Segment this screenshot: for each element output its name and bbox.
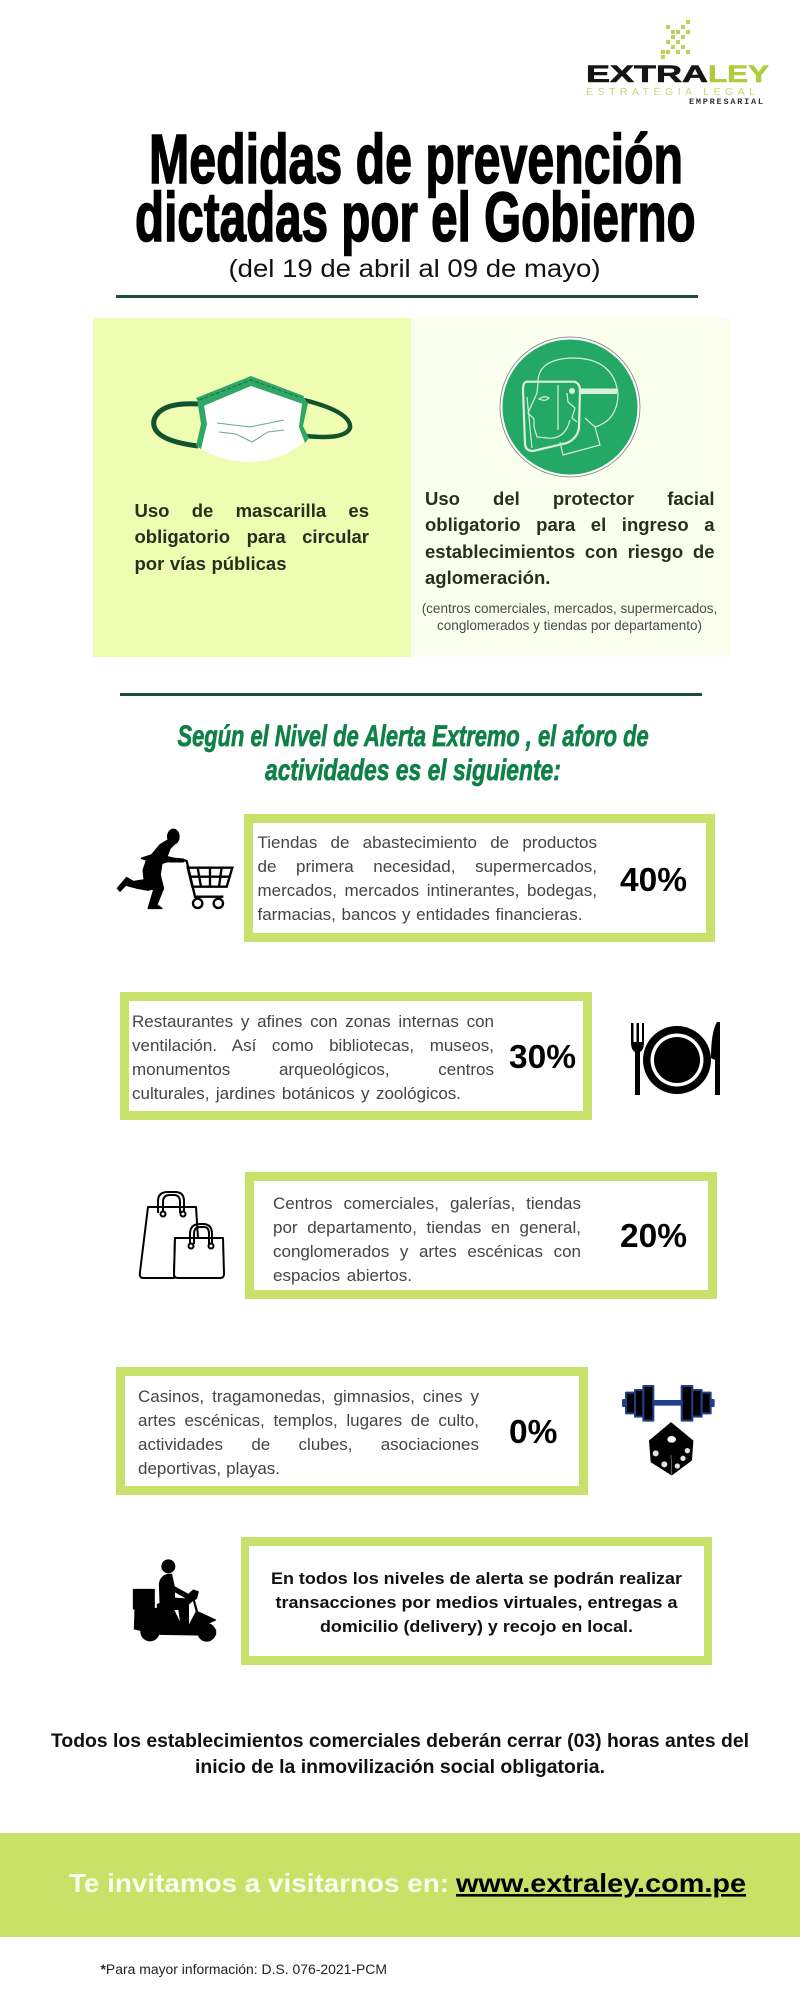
icon: plate and cutlery [631,1022,720,1095]
card text: Centros comerciales, galerías, tiendas [273,1194,581,1212]
text: mask requirement: por vías públicas [134,553,286,574]
panel: face shield [411,318,730,657]
card text: espacios abiertos. [273,1266,412,1284]
note: establishments: (centros comerciales, mercados, supermercados, [422,601,717,616]
card text: Restaurantes y afines con zonas internas con [132,1012,494,1031]
banner: website invitation [0,1833,800,1937]
logo word EXTRA: EXTRA [586,61,708,88]
text: shield requirement: obligatorio para el ingreso a [425,514,714,535]
text: shield requirement [425,488,715,588]
card: 0% [116,1367,588,1495]
text: shield requirement: establecimientos con riesgo de [425,541,714,562]
logo subline: EMPRESARIAL [689,97,763,107]
icon: dumbbell and dice [622,1385,715,1476]
card text: mercados, mercados intinerantes, bodegas, [258,881,597,900]
card: 40% [244,814,715,942]
banner: website invitation: Te invitamos a visitarnos en: [69,1868,449,1898]
icon: dumbbell [623,1386,714,1421]
logo word LEY: LEY [708,61,769,88]
icon: shopping bags [138,1191,225,1279]
card text [132,1012,494,1103]
text: shield requirement: aglomeración. [425,567,550,588]
note: establishments [422,601,717,633]
card text: Tiendas de abastecimiento de productos [258,833,597,852]
card text: monumentos arqueológicos, centros [132,1060,494,1079]
icon: face mask [151,376,352,462]
percentage: 20% [620,1218,687,1255]
card text: actividades de clubes, asociaciones [138,1434,479,1454]
heading: extreme alert level: actividades es el siguiente: [265,753,561,787]
card text [258,833,597,924]
card text: deportivas, playas. [138,1458,280,1478]
percentage: 40% [620,862,687,899]
text: closing hours [51,1731,749,1778]
icon: face shield sign [500,336,640,478]
callout: all alert levels [241,1537,712,1665]
icon: runner with shopping cart [116,828,234,910]
footnote: legal source: *Para mayor información: D.S. 076-2021-PCM [100,1962,387,1977]
card text: por departamento, tiendas en general, [273,1218,581,1236]
note: establishments: conglomerados y tiendas por departamento) [437,618,702,633]
card: 20% [245,1172,717,1299]
heading: extreme alert level [178,719,649,787]
text: mask requirement: Uso de mascarilla es [134,500,369,521]
panel: mask [93,318,411,657]
text: mask requirement [134,500,369,574]
card: 30% [120,992,592,1120]
card text: conglomerados y artes escénicas con [273,1242,581,1260]
card text: de primera necesidad, supermercados, [258,857,597,876]
callout: all alert levels: En todos los niveles de alerta se podrán realizar [271,1569,682,1588]
card text: ventilación. Así como bibliotecas, museos, [132,1036,494,1055]
subtitle: dates: (del 19 de abril al 09 de mayo) [228,255,600,283]
title: dictadas por el Gobierno [135,178,696,256]
card text: culturales, jardines botánicos y zoológicos. [132,1084,461,1103]
heading: extreme alert level: Según el Nivel de Alerta Extremo , el aforo de [178,719,649,753]
banner: website invitation: www.extraley.com.pe [455,1868,746,1898]
icon: pixel X mark [661,20,690,59]
icon: dice [650,1423,692,1474]
card text [138,1386,479,1478]
icon: delivery scooter [132,1559,216,1642]
logo tagline: ESTRATEGIA LEGAL [586,86,755,98]
title: Medidas de prevención [149,120,683,198]
card text [273,1194,581,1284]
percentage: 30% [509,1039,576,1076]
percentage: 0% [509,1414,557,1451]
logo: Extraley [586,20,770,107]
text: shield requirement: Uso del protector facial [425,488,714,509]
title [135,120,696,256]
card text: farmacias, bancos y entidades financieras. [258,905,582,924]
text: mask requirement: obligatorio para circular [134,526,369,547]
callout: all alert levels: transacciones por medios virtuales, entregas a [276,1593,678,1612]
card text: artes escénicas, templos, lugares de culto, [138,1410,479,1430]
callout: all alert levels: domicilio (delivery) y recojo en local. [320,1617,633,1636]
card text: Casinos, tragamonedas, gimnasios, cines y [138,1386,479,1406]
text: closing hours: inicio de la inmovilización social obligatoria. [195,1757,605,1778]
text: closing hours: Todos los establecimientos comerciales deberán cerrar (03) horas antes del [51,1731,749,1752]
